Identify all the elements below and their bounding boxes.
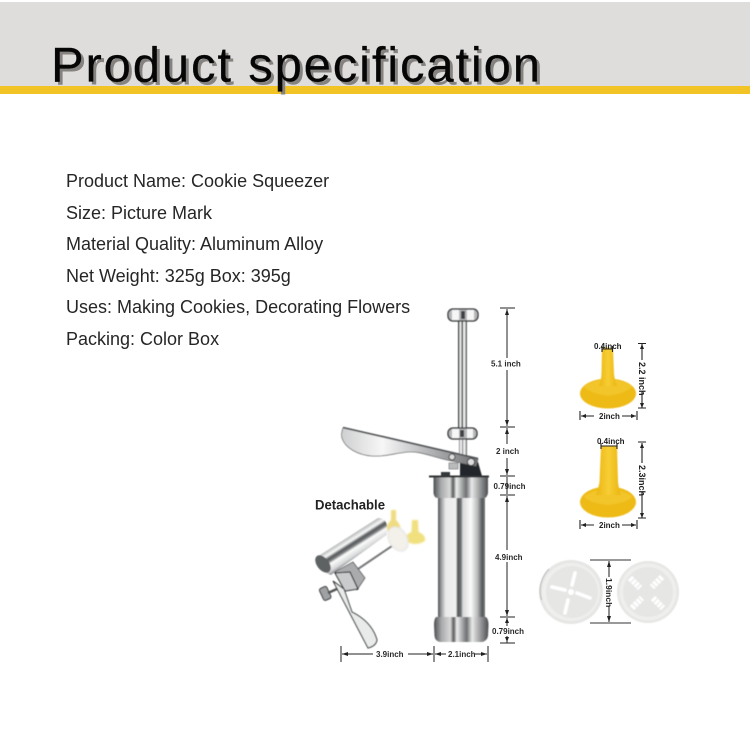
dimension labels main product: 2 inch bbox=[496, 447, 519, 456]
dimension lines nozzles bbox=[580, 344, 646, 529]
dimension discs: 1.9inch bbox=[604, 578, 614, 607]
dimension labels main product: 5.1 inch bbox=[491, 360, 521, 368]
dimension labels nozzles: 0.4inch bbox=[594, 342, 622, 351]
dimension labels main product: 0.79inch bbox=[492, 627, 524, 636]
title: Product specification bbox=[51, 39, 540, 93]
dimension labels nozzles bbox=[594, 342, 647, 530]
detached cylinder bbox=[312, 518, 387, 576]
cookie press main product bbox=[342, 309, 489, 642]
detached lever bbox=[333, 581, 377, 648]
detachable label: Detachable bbox=[315, 496, 385, 512]
detached rod bbox=[358, 546, 392, 569]
dimension labels nozzles: 2inch bbox=[599, 412, 620, 421]
dimension labels main product: 2.1inch bbox=[448, 650, 476, 659]
dimension labels nozzles: 2.2 inch bbox=[637, 362, 647, 396]
dimension lines main product bbox=[341, 308, 515, 662]
dimension arrowheads bbox=[342, 309, 509, 656]
yellow nozzle large bbox=[580, 446, 636, 518]
top cap bbox=[429, 472, 489, 498]
specification list: Uses: Making Cookies, Decorating Flowers bbox=[66, 297, 410, 317]
bottom cap bbox=[434, 617, 488, 642]
disc with slots bbox=[539, 560, 603, 624]
specification list: Material Quality: Aluminum Alloy bbox=[66, 234, 323, 254]
header band bbox=[0, 2, 750, 94]
dimension arrowheads nozzles bbox=[581, 344, 644, 527]
dimension labels nozzles: 0.4inch bbox=[597, 437, 625, 446]
lever handle bbox=[342, 428, 478, 469]
detached yellow nozzles bbox=[384, 510, 425, 555]
dimension labels nozzles: 2inch bbox=[599, 521, 620, 530]
black bracket bbox=[460, 459, 482, 476]
specification list: Net Weight: 325g Box: 395g bbox=[66, 266, 291, 286]
specification list: Size: Picture Mark bbox=[66, 203, 213, 223]
detached cookie press bbox=[312, 510, 425, 648]
dimension labels main product: 4.9inch bbox=[495, 553, 523, 562]
lower knob and stem bbox=[448, 428, 477, 460]
specification list: Product Name: Cookie Squeezer bbox=[66, 171, 329, 191]
dimension labels main product bbox=[376, 360, 526, 659]
top knob bbox=[448, 309, 478, 321]
dimension labels main product: 3.9inch bbox=[376, 650, 404, 659]
title: Product specification bbox=[54, 42, 543, 96]
specification list: Packing: Color Box bbox=[66, 329, 219, 349]
detached mechanism bbox=[335, 572, 358, 591]
yellow nozzle small bbox=[580, 348, 636, 408]
cylinder body bbox=[438, 498, 485, 618]
detached knob bbox=[319, 586, 339, 601]
plunger rod bbox=[458, 320, 467, 430]
dimension labels main product: 0.79inch bbox=[494, 482, 526, 491]
dimension labels nozzles: 2.3inch bbox=[637, 465, 647, 496]
disc with cutouts bbox=[617, 561, 679, 623]
detached cap bbox=[335, 562, 365, 590]
dimension discs bbox=[590, 560, 631, 623]
specification list bbox=[66, 171, 410, 349]
